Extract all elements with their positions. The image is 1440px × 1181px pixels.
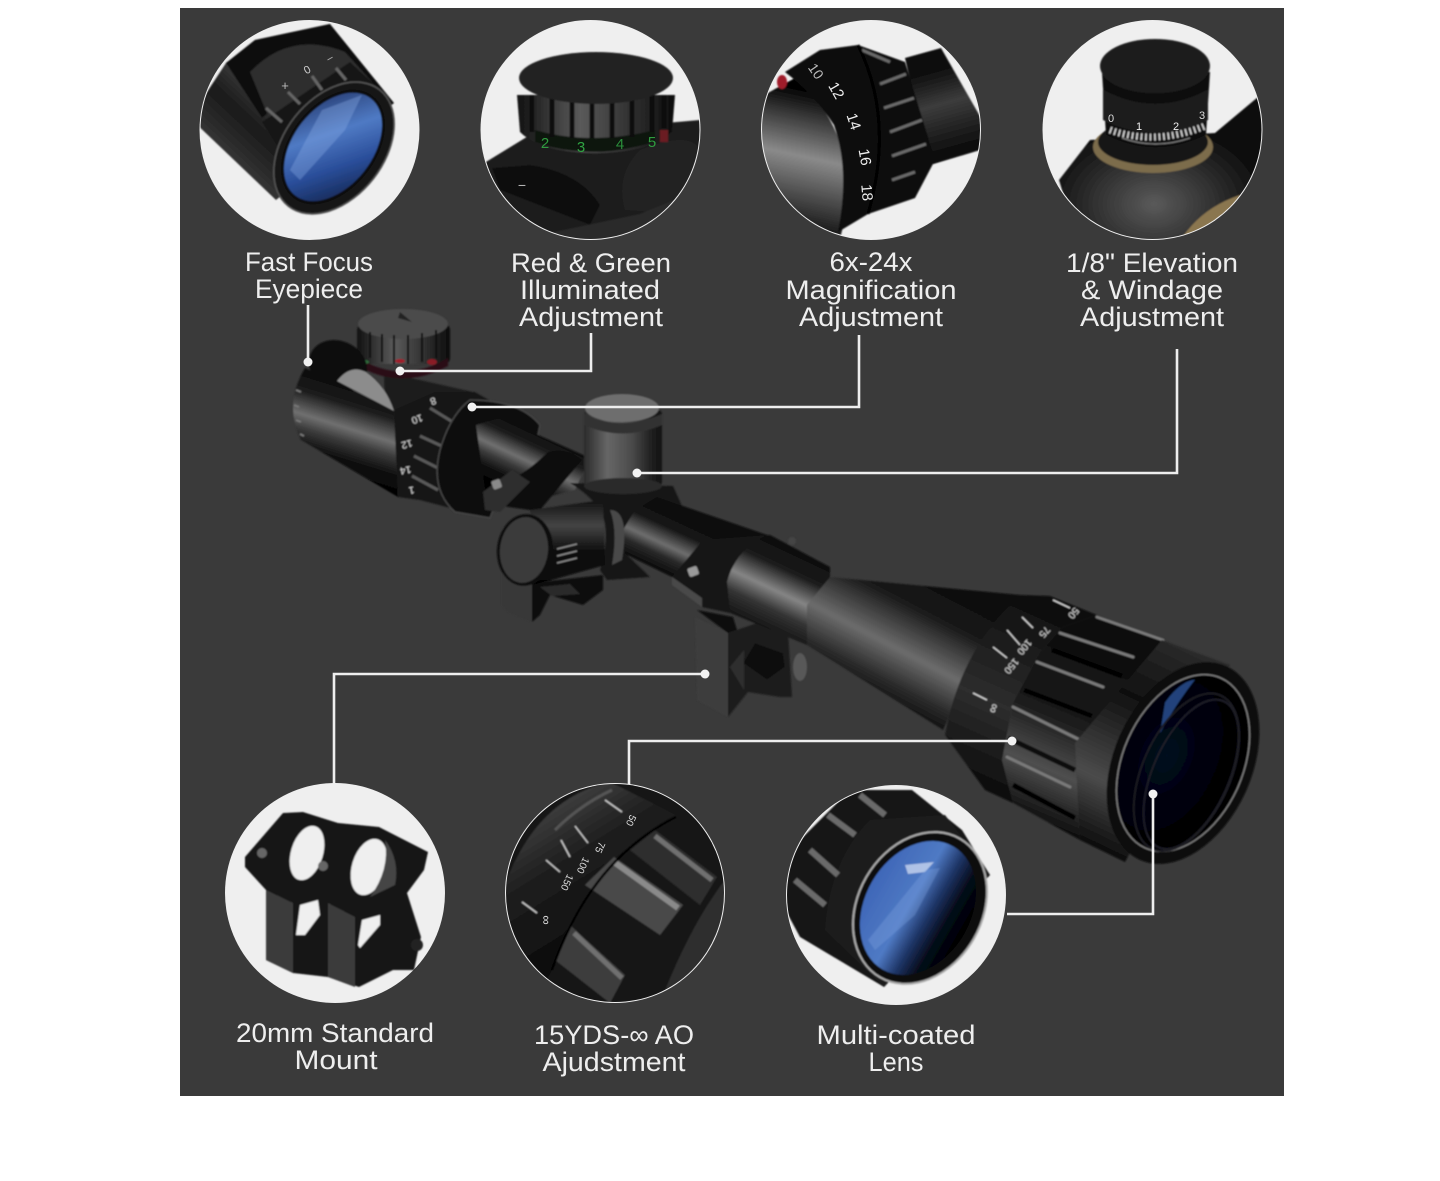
callout: magnification adjustment [468, 335, 859, 412]
label: Fast Focus Eyepiece: Fast Focus [245, 247, 373, 277]
label: 6x-24x Magnification Adjustment: Magnification [786, 275, 956, 305]
magnification ring: 1 [407, 484, 415, 495]
detail circle: magnification ring [750, 20, 985, 240]
detail circle: elevation and windage turret: 2 [1173, 121, 1179, 133]
detail circle: illumination knob: 4 [616, 136, 624, 153]
detail circle: fast focus eyepiece: − [323, 51, 337, 66]
label: 1/8 inch Elevation and Windage Adjustment: Adjustment [1080, 302, 1225, 332]
detail circle: AO adjustment ring [500, 780, 730, 1010]
detail circle: fast focus eyepiece: 0 [302, 64, 313, 77]
focus scale ring: 100 [1014, 637, 1033, 657]
illumination knob [357, 309, 473, 420]
label: Red and Green Illuminated Adjustment: Adjustment [519, 302, 664, 332]
rear ring mount [695, 610, 807, 717]
detail circle: fast focus eyepiece [190, 20, 420, 240]
detail circle: AO adjustment ring: 50 [623, 813, 638, 828]
callout: standard mount [334, 670, 710, 787]
magnification ring: 8 [428, 394, 437, 407]
eyepiece body [293, 368, 398, 497]
label: 6x-24x Magnification Adjustment: 6x-24x [830, 247, 913, 277]
callout: elevation and windage [632, 349, 1177, 478]
elevation turret saddle [570, 483, 682, 580]
focus knurled ring [1002, 615, 1168, 840]
dark background panel [180, 8, 1284, 1096]
label: 15YDS AO Ajudstment: Ajudstment [542, 1047, 686, 1077]
detail circle: elevation and windage turret: 1 [1136, 121, 1142, 133]
front tube [725, 535, 830, 645]
objective lens [1077, 638, 1289, 888]
focus scale ring: 150 [1001, 656, 1020, 676]
detail circle: multi-coated lens [780, 785, 1014, 1008]
detail circle: illumination knob: 2 [541, 135, 549, 152]
eyepiece ticks [294, 390, 304, 436]
detail circle: elevation and windage turret: 0 [1108, 113, 1114, 125]
label: 6x-24x Magnification Adjustment: Adjustment [799, 302, 944, 332]
detail circle: illumination knob: − [518, 177, 526, 193]
windage mount block [502, 527, 603, 622]
magnification ring: 14 [399, 463, 412, 476]
detail circle: AO adjustment ring: 75 [592, 840, 607, 855]
main rifle scope illustration [293, 309, 1289, 888]
focus scale ring: ∞ [986, 702, 1003, 715]
callout: AO adjustment [629, 736, 1016, 788]
detail circle: AO adjustment ring: ∞ [539, 915, 554, 925]
label: Multi-coated Lens: Lens [868, 1047, 924, 1077]
detail circle: elevation and windage turret: 3 [1199, 110, 1205, 122]
callout: multi-coated lens [1007, 790, 1158, 914]
detail circle: elevation and windage turret [1042, 20, 1270, 250]
detail circle: magnification ring: 12 [824, 79, 847, 102]
saddle highlight [610, 510, 624, 565]
focus scale ring: 75 [1036, 624, 1052, 640]
detail circle: AO adjustment ring: 100 [574, 855, 591, 875]
detail circle: magnification ring: 14 [843, 111, 864, 132]
label: 20mm Standard Mount: Mount [294, 1045, 378, 1075]
windage turret [493, 500, 605, 589]
magnification collar [437, 400, 540, 518]
label: Red and Green Illuminated Adjustment: Red & Green [511, 248, 671, 278]
objective collar [1075, 640, 1230, 862]
label: 15YDS AO Ajudstment: 15YDS-∞ AO [534, 1020, 694, 1050]
magnification ring: 10 [409, 411, 424, 426]
focus scale ring: 50 [1065, 605, 1081, 621]
eyepiece dome [300, 331, 376, 401]
elevation turret [584, 394, 662, 494]
callout: fast focus eyepiece [304, 305, 312, 366]
middle tube [610, 490, 770, 605]
detail circle: AO adjustment ring: 150 [558, 872, 575, 892]
detail circle: fast focus eyepiece: + [281, 78, 289, 93]
detail circle: illumination knob: 5 [648, 134, 656, 151]
rear ring clamp [672, 535, 796, 613]
label: 1/8 inch Elevation and Windage Adjustment: 1/8" Elevation [1066, 248, 1238, 278]
focus scale ring [945, 595, 1097, 803]
rear tube [476, 418, 590, 500]
detail circle: magnification ring: 10 [805, 60, 827, 82]
label: 20mm Standard Mount: 20mm Standard [236, 1018, 434, 1048]
detail circle: magnification ring: 16 [855, 148, 874, 167]
front ring clamp [483, 451, 582, 512]
label: Fast Focus Eyepiece: Eyepiece [255, 274, 363, 304]
label: Red and Green Illuminated Adjustment: Illuminated [520, 275, 660, 305]
callout: illuminated adjustment [396, 333, 591, 376]
objective taper [807, 577, 1020, 730]
detail circle: illumination knob [480, 20, 705, 250]
magnification ring: 12 [399, 437, 413, 450]
rifle scope infographic [180, 8, 1284, 1096]
detail circle: ring mounts [225, 783, 445, 1003]
detail circle: illumination knob: 3 [577, 139, 585, 156]
label: 1/8 inch Elevation and Windage Adjustment: & Windage [1081, 275, 1223, 305]
label: Multi-coated Lens: Multi-coated [816, 1020, 976, 1050]
detail circle: magnification ring: 18 [857, 184, 876, 202]
magnification ring [394, 392, 510, 510]
eyepiece highlight [337, 369, 394, 411]
